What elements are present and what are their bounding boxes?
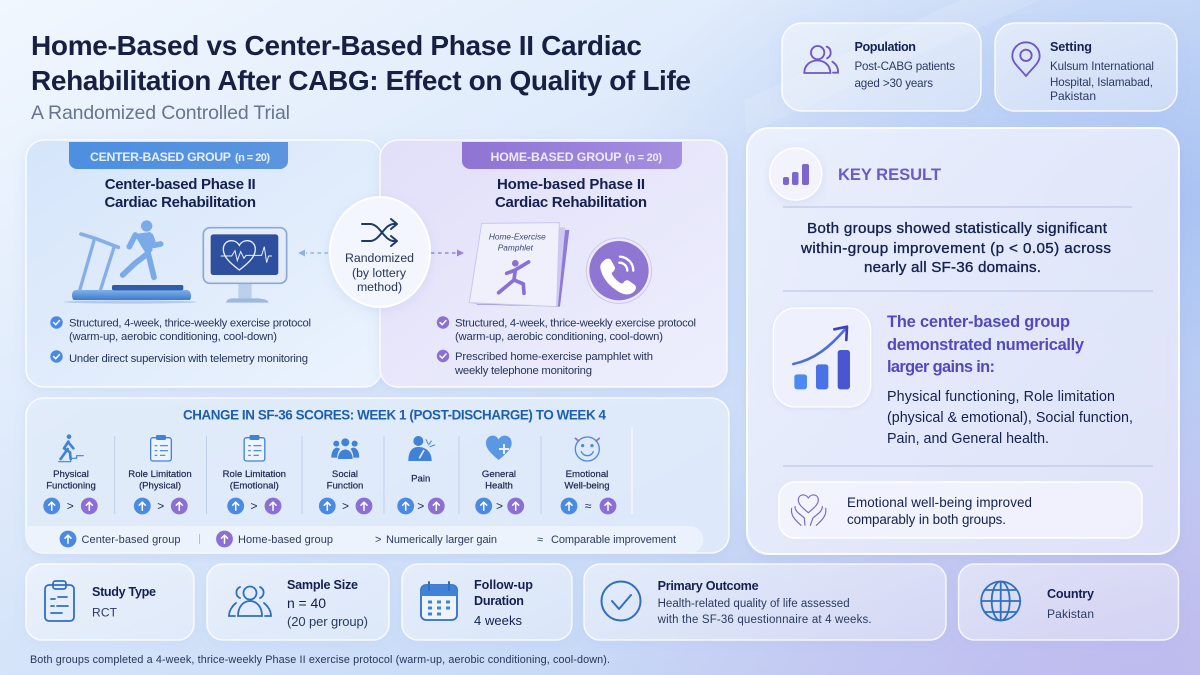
- tag: center-based group: [69, 142, 288, 169]
- icon: treadmill with runner: [63, 220, 197, 304]
- panel: center-based group: [26, 140, 382, 387]
- heading: larger gains: The center-based group: [887, 313, 1070, 331]
- item: pain: Pain: [411, 474, 430, 484]
- panel: SF-36 change: [26, 398, 729, 553]
- item: emotional well-being: ≈: [585, 499, 592, 513]
- card: sample size: [207, 564, 389, 640]
- legend: Home-based group: [238, 534, 333, 546]
- item: physical functioning: Functioning: [46, 480, 96, 492]
- icon: pamphlet: Pamphlet: [498, 243, 534, 253]
- item: emotional well-being: [561, 437, 616, 514]
- subtitle: A Randomized Controlled Trial: [31, 102, 290, 124]
- card: country: [958, 564, 1178, 640]
- bullet list: home: [437, 316, 696, 377]
- heading: home-based: Home-based Phase II: [497, 176, 645, 193]
- randomized circle: Randomized: [345, 251, 414, 265]
- text: domains: Physical functioning, Role limitation: [887, 389, 1115, 405]
- icon: shuffle: [362, 219, 397, 246]
- text: domains: (physical & emotional), Social function,: [887, 410, 1133, 426]
- card: primary outcome: Primary Outcome: [658, 579, 759, 593]
- heading: home-based: Cardiac Rehabilitation: [495, 194, 647, 211]
- icon: pamphlet: Home-Exercise: [489, 231, 546, 241]
- item: emotional well-being: Emotional: [566, 469, 608, 480]
- icon: group: [229, 586, 271, 616]
- icon: telephone: [586, 238, 652, 303]
- item: general health: >: [496, 499, 503, 513]
- item: role limitation emotional: >: [250, 499, 258, 513]
- title: Rehabilitation After CABG: Effect on Quality of Life: [31, 65, 691, 96]
- legend: Numerically larger gain: [386, 534, 497, 546]
- item: role limitation physical: (Physical): [139, 480, 181, 492]
- randomized circle: method): [357, 280, 402, 294]
- item: role limitation physical: Role Limitation: [128, 469, 192, 480]
- item: physical functioning: [43, 434, 98, 514]
- legend: Comparable improvement: [551, 534, 676, 546]
- heading: home-based: [495, 176, 647, 211]
- bullet list: center: [50, 316, 311, 365]
- legend: Center-based group: [82, 534, 180, 546]
- card: primary outcome: [584, 564, 946, 640]
- legend: ≈: [537, 534, 543, 546]
- icon: check circle: [602, 582, 640, 620]
- card: study type: RCT: [92, 606, 118, 620]
- item: physical functioning: >: [67, 499, 74, 513]
- card: country: Country: [1047, 587, 1094, 601]
- item: pain: [397, 436, 445, 514]
- panel: population: Population: [854, 40, 916, 54]
- item: social function: [319, 438, 372, 514]
- panel: setting: [995, 23, 1177, 111]
- statement: Both groups showed statistically significant: [807, 220, 1108, 237]
- icon: heart monitor: [203, 228, 287, 303]
- card: sample size: Sample Size: [287, 578, 358, 592]
- callout: emotional well-being: comparably in both groups.: [847, 512, 1006, 527]
- item: social function: >: [342, 499, 349, 513]
- card: follow-up: Duration: [474, 594, 524, 608]
- heading: larger gains: [887, 313, 1085, 376]
- icon: growth chart tile: [773, 308, 871, 407]
- panel: setting: Kulsum International: [1050, 60, 1154, 73]
- panel: setting: Hospital, Islamabad,: [1050, 76, 1153, 89]
- callout: emotional well-being: Emotional well-being improved: [847, 495, 1032, 510]
- statement: nearly all SF-36 domains.: [864, 259, 1041, 276]
- text: domains: [887, 389, 1133, 447]
- bullet list: home: Structured, 4-week, thrice-weekly exercise protocol: [455, 318, 696, 330]
- bullet list: home: (warm-up, aerobic conditioning, cool-down): [455, 331, 663, 343]
- card: follow-up: Follow-up: [474, 578, 533, 592]
- item: role limitation emotional: Role Limitation: [223, 469, 286, 480]
- panel: setting: Pakistan: [1050, 89, 1096, 103]
- item: role limitation emotional: (Emotional): [230, 480, 279, 492]
- tag: home-based group: [462, 142, 682, 169]
- panel: key result: [747, 128, 1179, 554]
- heading: center-based: Cardiac Rehabilitation: [104, 194, 256, 211]
- item: role limitation physical: [128, 435, 192, 514]
- bullet list: center: Structured, 4-week, thrice-weekly exercise protocol: [69, 318, 311, 330]
- icon: people: [804, 46, 838, 73]
- heading: key result: KEY RESULT: [838, 165, 941, 184]
- icon: key result bars: [770, 148, 822, 200]
- icon: pamphlet: [469, 223, 569, 307]
- item: social function: Function: [327, 480, 363, 492]
- item: role limitation emotional: [223, 435, 286, 514]
- tag: home-based group: HOME-BASED GROUP: [490, 150, 622, 164]
- text: domains: Pain, and General health.: [887, 431, 1049, 447]
- item: general health: Health: [485, 480, 513, 492]
- chart title: CHANGE IN SF-36 SCORES: WEEK 1 (POST-DISCHARGE) TO WEEK 4: [183, 408, 607, 422]
- statement: within-group improvement (p < 0.05) across: [800, 240, 1111, 257]
- item: physical functioning: Physical: [53, 469, 89, 480]
- heading: center-based: Center-based Phase II: [105, 176, 256, 193]
- randomized circle: [330, 197, 430, 307]
- bullet list: home: Prescribed home-exercise pamphlet with: [455, 351, 653, 363]
- tag: center-based group: CENTER-BASED GROUP: [90, 150, 231, 164]
- title: [31, 30, 691, 96]
- bullet list: home: weekly telephone monitoring: [454, 365, 592, 377]
- item: emotional well-being: Well-being: [564, 480, 610, 492]
- arrow: to center-based: [298, 250, 328, 256]
- card: country: Pakistan: [1047, 607, 1094, 621]
- item: general health: [475, 436, 524, 514]
- item: pain: >: [417, 499, 424, 513]
- item: general health: General: [482, 469, 516, 480]
- panel: population: [782, 23, 981, 111]
- heading: center-based: [104, 176, 256, 211]
- heading: larger gains: larger gains in:: [887, 358, 995, 376]
- icon: location pin: [1012, 42, 1040, 76]
- callout: emotional well-being: [779, 482, 1142, 538]
- card: sample size: n = 40: [287, 595, 326, 611]
- arrow: to home-based: [431, 250, 464, 256]
- footnote: Both groups completed a 4-week, thrice-weekly Phase II exercise protocol (warm-up, aerobic conditioning, cool-down).: [30, 654, 610, 666]
- panel: setting: Setting: [1050, 40, 1092, 54]
- card: primary outcome: with the SF-36 questionnaire at 4 weeks.: [657, 614, 872, 626]
- tag: center-based group: (n = 20): [235, 152, 270, 164]
- icon: calendar: [421, 582, 457, 620]
- bullet list: center: (warm-up, aerobic conditioning, cool-down): [69, 331, 277, 343]
- icon: globe: [981, 582, 1020, 620]
- title: Home-Based vs Center-Based Phase II Cardiac: [31, 30, 642, 61]
- randomized circle: (by lottery: [352, 266, 407, 280]
- heading: larger gains: demonstrated numerically: [887, 336, 1085, 354]
- card: study type: Study Type: [92, 585, 156, 599]
- card: follow-up: 4 weeks: [474, 613, 522, 628]
- statement: [800, 220, 1111, 276]
- legend: [26, 526, 704, 553]
- icon: heart in hands: [791, 495, 826, 525]
- card: follow-up: [402, 564, 572, 640]
- card: primary outcome: Health-related quality of life assessed: [658, 598, 850, 610]
- legend: >: [375, 534, 381, 546]
- card: study type: [26, 564, 194, 640]
- panel: home-based group: [380, 140, 727, 387]
- card: sample size: (20 per group): [287, 614, 368, 629]
- icon: clipboard: [45, 581, 74, 621]
- item: social function: Social: [332, 469, 358, 480]
- tag: home-based group: (n = 20): [625, 152, 662, 164]
- bullet list: center: Under direct supervision with telemetry monitoring: [69, 353, 308, 365]
- panel: population: Post-CABG patients: [854, 60, 955, 73]
- item: role limitation physical: >: [157, 499, 164, 513]
- panel: population: aged >30 years: [854, 77, 933, 90]
